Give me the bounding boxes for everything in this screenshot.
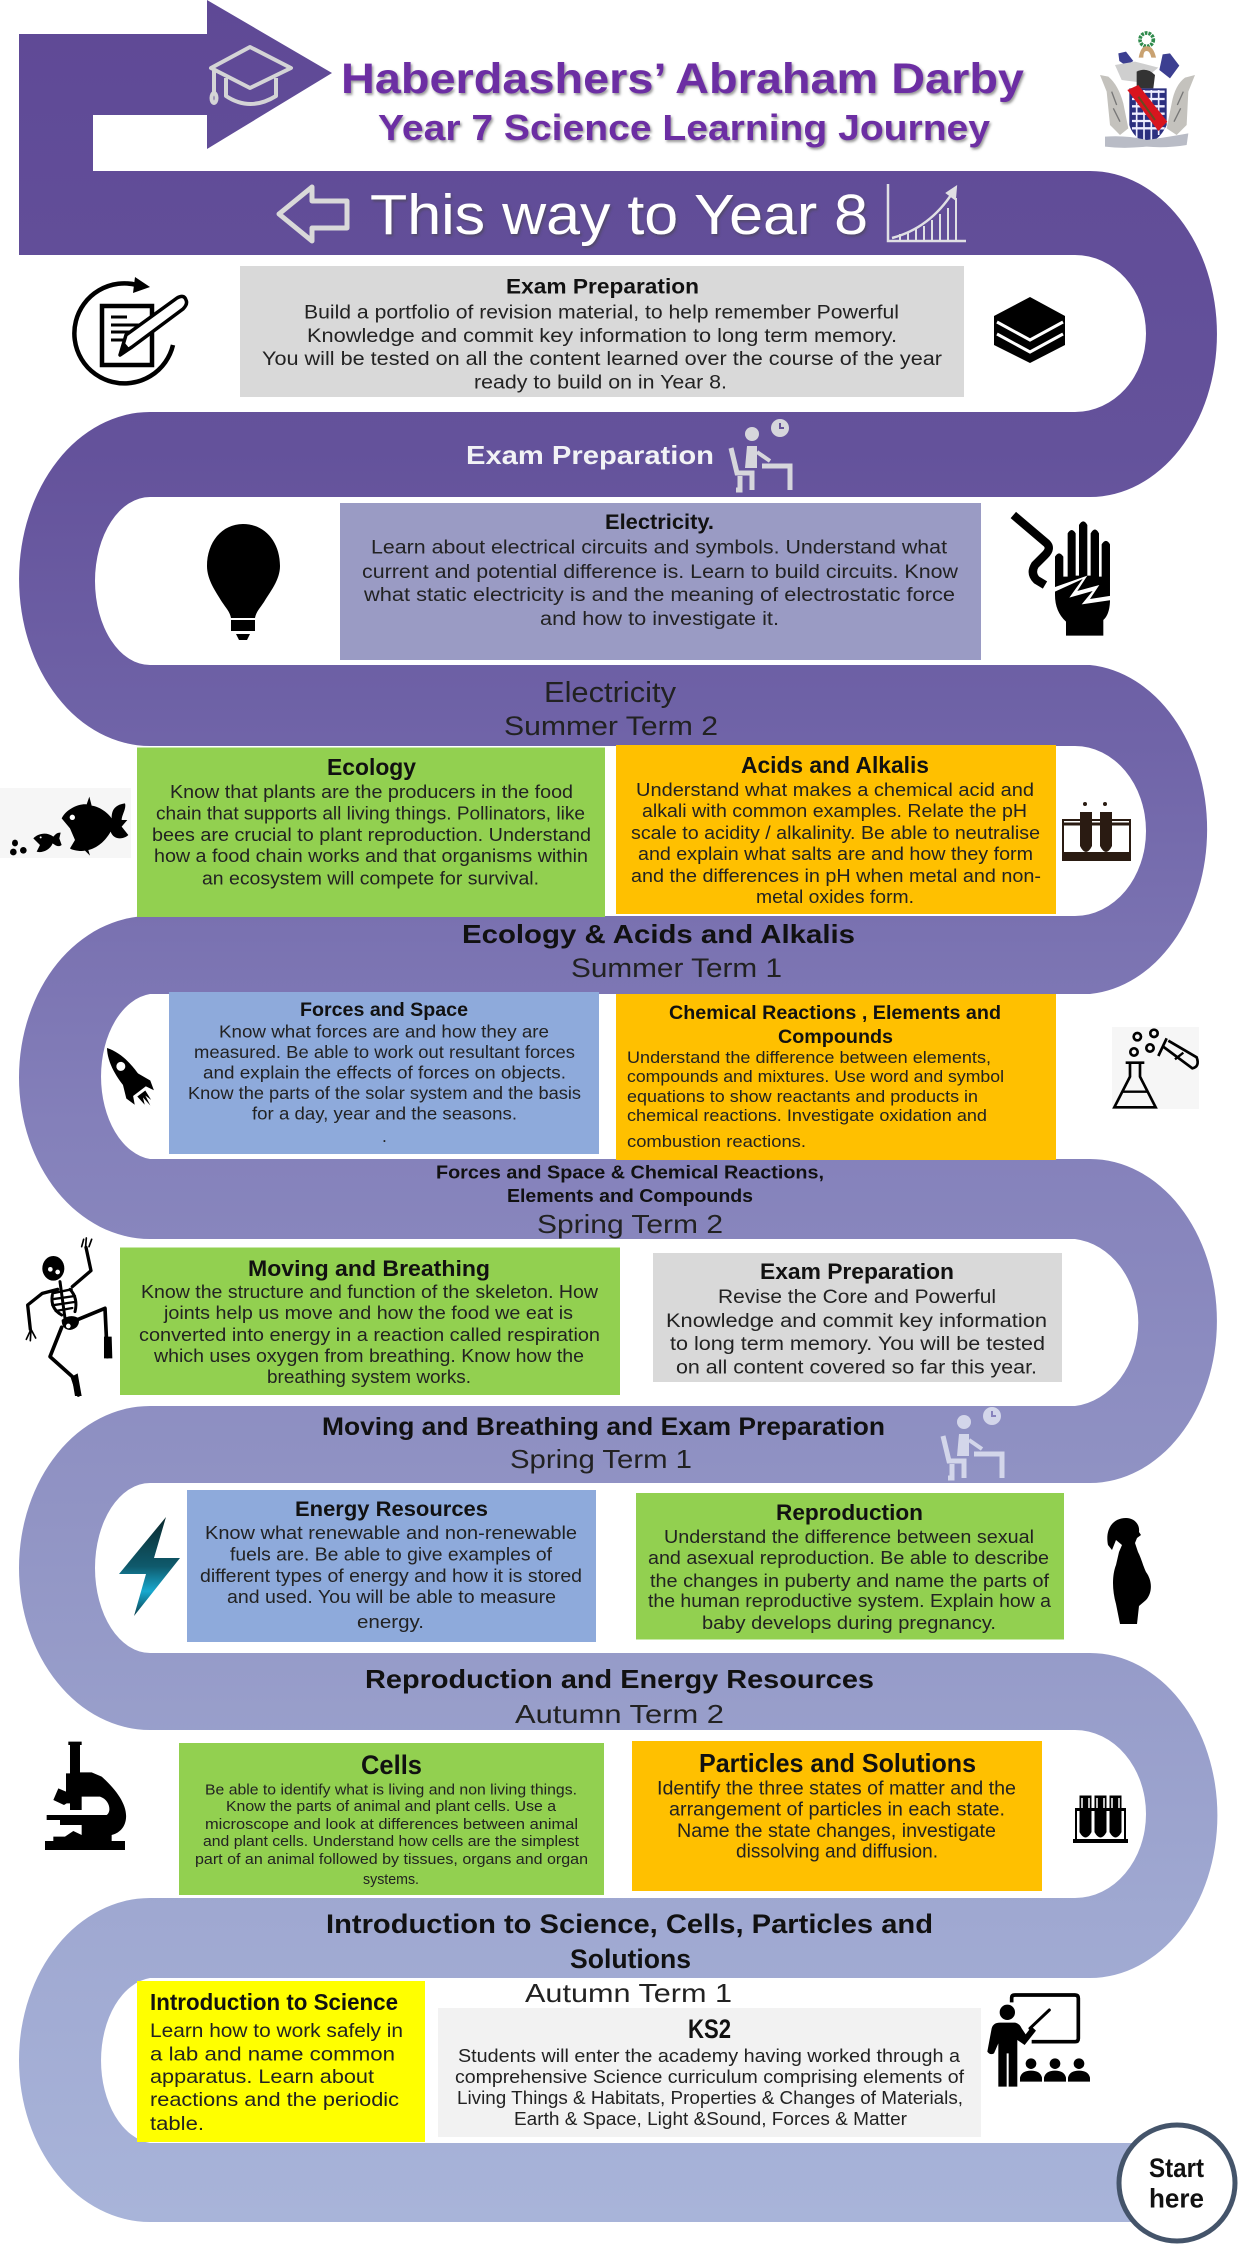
panel: acids and alkalis: alkali with common examples. Relate the pH bbox=[642, 801, 1027, 821]
panel: introduction to science: Introduction to Science bbox=[150, 1989, 398, 2015]
panel: particles and solutions: Particles and Solutions bbox=[699, 1748, 976, 1778]
term heading: ecology and acids: Ecology & Acids and Alkalis bbox=[462, 919, 855, 949]
term heading: reproduction and energy: Reproduction and Energy Resources bbox=[365, 1664, 874, 1694]
panel: reproduction: baby develops during pregnancy. bbox=[702, 1613, 996, 1633]
panel: KS2: KS2 bbox=[688, 2014, 731, 2044]
panel: energy resources: different types of energy and how it is stored bbox=[200, 1566, 582, 1586]
panel: energy resources bbox=[187, 1490, 596, 1642]
panel: cells: Know the parts of animal and plant cells. Use a bbox=[226, 1798, 557, 1815]
icon: test tubes in rack bbox=[1062, 802, 1130, 860]
panel: introduction to science: a lab and name common bbox=[150, 2044, 395, 2066]
panel: energy resources: fuels are. Be able to give examples of bbox=[230, 1544, 553, 1564]
term heading: forces and chemical: Elements and Compounds bbox=[507, 1186, 753, 1206]
term heading: forces and chemical bbox=[436, 1162, 824, 1239]
panel: moving and breathing: Know the structure and function of the skeleton. How bbox=[141, 1282, 599, 1302]
panel: chemical reactions: Chemical Reactions , Elements and bbox=[669, 1003, 1001, 1024]
start here circle: Start bbox=[1149, 2153, 1204, 2183]
panel: exam preparation spring bbox=[653, 1253, 1062, 1382]
term heading: ecology and acids bbox=[462, 919, 855, 983]
panel: cells: microscope and look at differences between animal bbox=[205, 1816, 578, 1833]
icon: graduation cap bbox=[211, 47, 291, 104]
panel: chemical reactions: Compounds bbox=[778, 1027, 893, 1048]
start here circle: here bbox=[1149, 2184, 1204, 2214]
panel: exam preparation final bbox=[240, 266, 964, 397]
panel: chemical reactions: chemical reactions. Investigate oxidation and bbox=[627, 1107, 987, 1125]
panel: forces and space: and explain the effects of forces on objects. bbox=[203, 1062, 566, 1082]
panel: chemical reactions: equations to show reactants and products in bbox=[627, 1088, 978, 1106]
icon: stack of books bbox=[994, 297, 1065, 363]
panel: electricity: Electricity. bbox=[605, 511, 714, 534]
title: Year 7 Science Learning Journey bbox=[378, 107, 990, 148]
panel: introduction to science bbox=[137, 1981, 425, 2142]
term heading: forces and chemical: Forces and Space & Chemical Reactions, bbox=[436, 1162, 824, 1182]
panel: KS2 bbox=[438, 2008, 981, 2137]
panel: acids and alkalis: Acids and Alkalis bbox=[741, 752, 929, 778]
title: Haberdashers’ Abraham Darby bbox=[341, 55, 1024, 103]
panel: acids and alkalis bbox=[616, 745, 1056, 914]
term heading: introduction cells particles: Solutions bbox=[570, 1944, 691, 1974]
panel: ecology: Know that plants are the producers in the food bbox=[170, 782, 573, 802]
panel: reproduction: and asexual reproduction. Be able to describe bbox=[648, 1548, 1049, 1568]
start here circle bbox=[1119, 2125, 1235, 2241]
panel: chemical reactions bbox=[616, 994, 1056, 1160]
term heading: electricity summer term 2: Electricity bbox=[544, 677, 677, 709]
panel: reproduction: Understand the difference between sexual bbox=[664, 1527, 1034, 1547]
panel: KS2: Students will enter the academy having worked through a bbox=[458, 2046, 961, 2066]
panel: electricity: current and potential difference is. Learn to build circuits. Know bbox=[362, 562, 958, 583]
panel: introduction to science: table. bbox=[150, 2113, 204, 2135]
term heading: reproduction and energy bbox=[365, 1664, 874, 1729]
panel: acids and alkalis: Understand what makes a chemical acid and bbox=[636, 780, 1034, 800]
panel: electricity bbox=[340, 503, 981, 660]
panel: reproduction bbox=[636, 1493, 1064, 1640]
panel: cells: Cells bbox=[361, 1750, 422, 1780]
panel: ecology: an ecosystem will compete for survival. bbox=[202, 868, 539, 888]
title bbox=[341, 55, 1024, 148]
panel: exam preparation final: You will be tested on all the content learned over the course of the year bbox=[262, 349, 943, 370]
panel: acids and alkalis: metal oxides form. bbox=[756, 887, 914, 907]
panel: ecology: bees are crucial to plant reproduction. Understand bbox=[152, 825, 591, 845]
panel: ecology: chain that supports all living things. Pollinators, like bbox=[156, 804, 585, 824]
panel: forces and space: Know what forces are and how they are bbox=[219, 1022, 549, 1042]
icon: food chain fish bbox=[0, 788, 131, 858]
icon: rising chart bbox=[888, 184, 966, 241]
term heading: introduction cells particles: Introduction to Science, Cells, Particles and bbox=[326, 1909, 933, 1939]
panel: electricity: and how to investigate it. bbox=[540, 609, 779, 630]
panel: introduction to science: apparatus. Learn about bbox=[150, 2066, 375, 2088]
icon: light bulb bbox=[207, 524, 280, 640]
panel: acids and alkalis: and the differences in pH when metal and non- bbox=[631, 866, 1041, 886]
panel: acids and alkalis: scale to acidity / alkalinity. Be able to neutralise bbox=[631, 823, 1040, 843]
panel: KS2: Earth & Space, Light &Sound, Forces & Matter bbox=[514, 2109, 907, 2129]
panel: exam preparation final: Build a portfolio of revision material, to help remember Powerful bbox=[304, 302, 899, 324]
panel: ecology: Ecology bbox=[327, 754, 416, 780]
icon: student at desk bbox=[731, 419, 790, 490]
panel: chemical reactions: combustion reactions. bbox=[627, 1133, 806, 1151]
panel: exam preparation final: Knowledge and commit key information to long term memory. bbox=[307, 326, 897, 347]
term label: autumn term 1: Autumn Term 1 bbox=[525, 1978, 732, 2008]
panel: forces and space: . bbox=[382, 1126, 387, 1146]
term heading: electricity summer term 2 bbox=[504, 677, 718, 741]
panel: exam preparation spring: Revise the Core and Powerful bbox=[718, 1287, 996, 1308]
panel: moving and breathing: Moving and Breathing bbox=[248, 1256, 490, 1281]
panel: forces and space: for a day, year and the seasons. bbox=[252, 1104, 517, 1124]
term heading: moving and exam bbox=[322, 1413, 885, 1474]
term heading: forces and chemical: Spring Term 2 bbox=[537, 1209, 723, 1239]
icon: skeleton bbox=[26, 1238, 112, 1396]
panel: reproduction: Reproduction bbox=[776, 1500, 923, 1525]
icon: rocket bbox=[95, 1039, 162, 1115]
panel: ecology: how a food chain works and that organisms within bbox=[154, 846, 588, 866]
panel: exam preparation spring: on all content covered so far this year. bbox=[676, 1358, 1037, 1378]
icon: microscope bbox=[45, 1742, 126, 1850]
icon: left arrow outline bbox=[279, 187, 347, 241]
panel: reproduction: the changes in puberty and name the parts of bbox=[650, 1571, 1050, 1591]
term heading: electricity summer term 2: Summer Term 2 bbox=[504, 711, 718, 741]
panel: KS2: comprehensive Science curriculum comprising elements of bbox=[455, 2067, 965, 2087]
panel: electricity: Learn about electrical circuits and symbols. Understand what bbox=[371, 538, 948, 558]
panel: reproduction: the human reproductive system. Explain how a bbox=[648, 1591, 1052, 1611]
panel: electricity: what static electricity is and the meaning of electrostatic force bbox=[363, 585, 955, 606]
panel: forces and space: Know the parts of the solar system and the basis bbox=[188, 1083, 581, 1103]
panel: introduction to science: Learn how to work safely in bbox=[150, 2020, 403, 2042]
panel: cells bbox=[179, 1743, 604, 1895]
panel: energy resources: and used. You will be able to measure bbox=[227, 1587, 556, 1607]
icon: student at desk light bbox=[943, 1407, 1002, 1478]
panel: cells: part of an animal followed by tissues, organs and organ bbox=[195, 1851, 588, 1868]
panel: cells: systems. bbox=[363, 1871, 419, 1888]
term heading: ecology and acids: Summer Term 1 bbox=[571, 953, 782, 983]
panel: moving and breathing: breathing system works. bbox=[267, 1367, 471, 1387]
panel: ecology bbox=[137, 748, 605, 917]
panel: energy resources: Know what renewable and non-renewable bbox=[205, 1523, 577, 1543]
icon: lightning bolt bbox=[119, 1517, 180, 1616]
panel: acids and alkalis: and explain what salts are and how they form bbox=[638, 844, 1033, 864]
panel: introduction to science: reactions and the periodic bbox=[150, 2089, 399, 2111]
panel: exam preparation spring: Knowledge and commit key information bbox=[666, 1311, 1047, 1332]
term heading: moving and exam: Moving and Breathing and Exam Preparation bbox=[322, 1413, 885, 1441]
panel: exam preparation spring: Exam Preparation bbox=[760, 1259, 954, 1284]
panel: moving and breathing: which uses oxygen from breathing. Know how the bbox=[153, 1346, 584, 1366]
panel: particles and solutions: arrangement of particles in each state. bbox=[669, 1800, 1005, 1820]
term heading: reproduction and energy: Autumn Term 2 bbox=[515, 1699, 724, 1729]
panel: cells: and plant cells. Understand how cells are the simplest bbox=[203, 1833, 580, 1850]
panel: chemical reactions: compounds and mixtures. Use word and symbol bbox=[627, 1068, 1004, 1086]
term heading: introduction cells particles bbox=[326, 1909, 933, 1974]
panel: KS2: Living Things & Habitats, Properties & Changes of Materials, bbox=[457, 2088, 963, 2108]
icon: revise document and pencil bbox=[74, 277, 187, 383]
panel: exam preparation final: ready to build on in Year 8. bbox=[474, 372, 727, 394]
icon: test tube rack bbox=[1073, 1796, 1128, 1843]
panel: forces and space: Forces and Space bbox=[300, 1000, 468, 1021]
icon: flask and test tube bbox=[1112, 1027, 1199, 1109]
panel: exam preparation spring: to long term memory. You will be tested bbox=[670, 1334, 1045, 1355]
panel: forces and space bbox=[169, 992, 599, 1154]
panel: particles and solutions: Name the state changes, investigate bbox=[677, 1821, 996, 1842]
panel: moving and breathing: joints help us move and how the food we eat is bbox=[163, 1303, 573, 1323]
panel: moving and breathing bbox=[120, 1248, 620, 1395]
panel: moving and breathing: converted into energy in a reaction called respiration bbox=[139, 1325, 600, 1345]
heading: this way to Year 8: This way to Year 8 bbox=[370, 183, 868, 247]
icon: school crest bbox=[1100, 33, 1195, 148]
icon: electric shock hand bbox=[1013, 515, 1112, 636]
panel: particles and solutions bbox=[632, 1741, 1042, 1891]
heading: exam preparation: Exam Preparation bbox=[466, 440, 714, 470]
panel: chemical reactions: Understand the difference between elements, bbox=[627, 1049, 991, 1067]
panel: energy resources: Energy Resources bbox=[295, 1498, 488, 1521]
panel: particles and solutions: dissolving and diffusion. bbox=[736, 1842, 938, 1862]
icon: teacher with class bbox=[987, 1995, 1090, 2087]
panel: cells: Be able to identify what is living and non living things. bbox=[205, 1782, 577, 1798]
panel: particles and solutions: Identify the three states of matter and the bbox=[657, 1778, 1016, 1800]
panel: forces and space: measured. Be able to work out resultant forces bbox=[194, 1042, 575, 1062]
panel: exam preparation final: Exam Preparation bbox=[506, 276, 699, 298]
panel: energy resources: energy. bbox=[357, 1612, 424, 1632]
icon: pregnant silhouette bbox=[1107, 1518, 1151, 1624]
term heading: moving and exam: Spring Term 1 bbox=[510, 1444, 692, 1474]
